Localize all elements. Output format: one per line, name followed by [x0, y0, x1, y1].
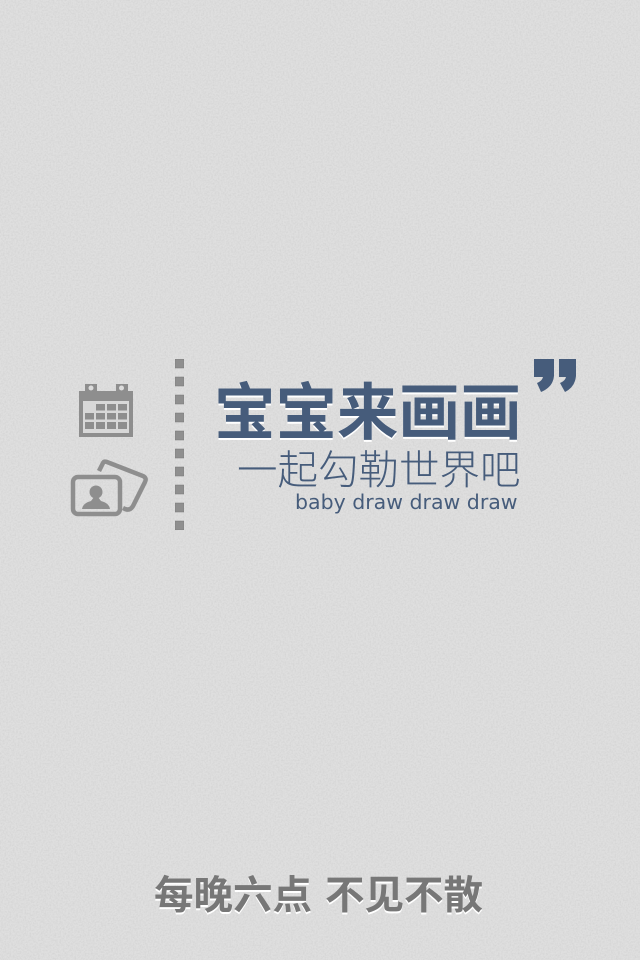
- bottom slogan: [154, 864, 483, 921]
- bottom slogan: 每晚六点: [154, 864, 312, 921]
- title: 宝宝来画画: [214, 363, 522, 452]
- icon: photo cards: [70, 459, 148, 516]
- subtitle: 一起勾勒世界吧: [237, 437, 520, 496]
- icon: closing quote mark: [534, 359, 576, 392]
- icon: calendar: [79, 384, 133, 437]
- english tagline: baby draw draw draw: [295, 490, 518, 514]
- bottom slogan: 不见不散: [325, 864, 483, 921]
- dotted divider: [175, 359, 184, 530]
